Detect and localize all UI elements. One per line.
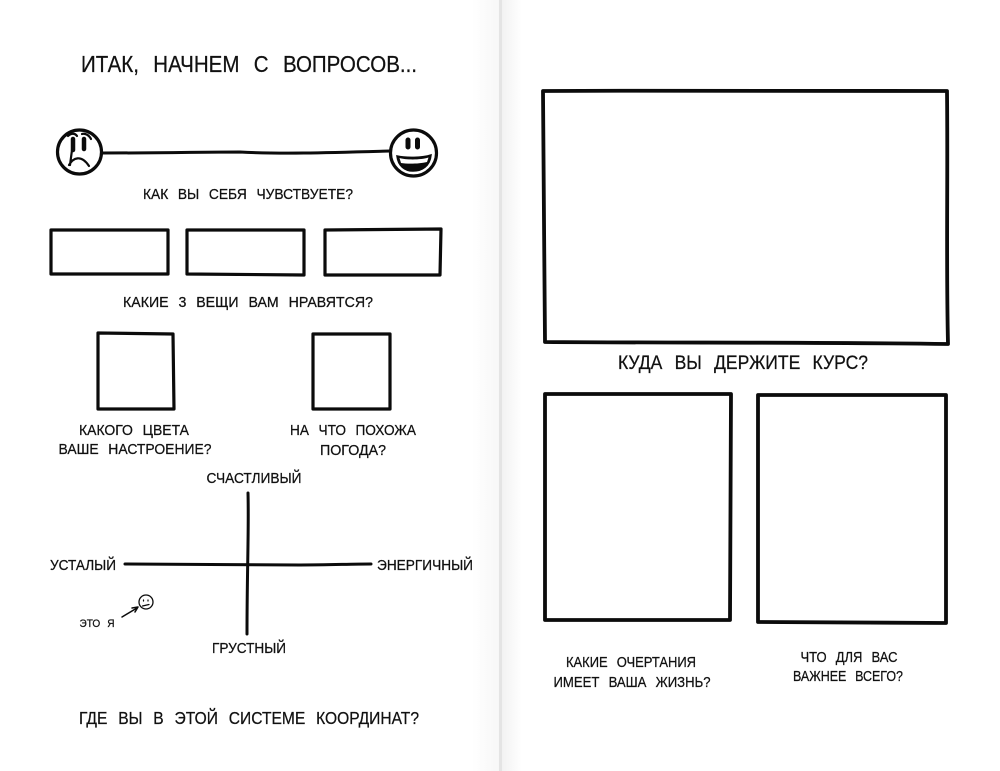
caption: mood colour: КАКОГО ЦВЕТА <box>79 423 189 439</box>
axis label: tired: УСТАЛЫЙ <box>50 556 116 574</box>
weather box <box>313 334 390 409</box>
caption: life shape: ИМЕЕТ ВАША ЖИЗНЬ? <box>554 675 710 691</box>
caption: course: КУДА ВЫ ДЕРЖИТЕ КУРС? <box>618 353 868 374</box>
caption: weather <box>290 423 416 459</box>
vertical axis <box>247 493 248 634</box>
axis label: sad: ГРУСТНЫЙ <box>212 639 286 657</box>
scale line <box>102 151 390 153</box>
this is me note <box>80 595 153 630</box>
caption: weather: НА ЧТО ПОХОЖА <box>290 423 416 439</box>
caption: what matters: ЧТО ДЛЯ ВАС <box>800 650 898 666</box>
arrow <box>122 607 138 617</box>
what matters box <box>758 395 946 623</box>
caption: life shape <box>554 655 710 691</box>
caption: life shape: КАКИЕ ОЧЕРТАНИЯ <box>566 655 696 671</box>
box 3 <box>325 229 441 275</box>
icon: small face <box>139 595 153 609</box>
icon: happy face <box>390 130 436 176</box>
icon: sad face <box>58 130 102 174</box>
large course box <box>543 91 948 344</box>
caption: mood colour: ВАШЕ НАСТРОЕНИЕ? <box>58 442 212 458</box>
book spine fold <box>472 0 522 771</box>
caption: mood colour <box>58 423 212 458</box>
mood scale <box>58 130 436 176</box>
life shape box <box>545 394 731 620</box>
title: ИТАК, НАЧНЕМ С ВОПРОСОВ... <box>81 51 417 77</box>
axis label: energetic: ЭНЕРГИЧНЫЙ <box>377 556 473 574</box>
caption: weather: ПОГОДА? <box>320 443 386 459</box>
box 2 <box>187 230 304 275</box>
caption: coordinates: ГДЕ ВЫ В ЭТОЙ СИСТЕМЕ КООРДИНАТ? <box>79 707 419 728</box>
caption: what matters: ВАЖНЕЕ ВСЕГО? <box>793 669 903 685</box>
caption: three things: КАКИЕ 3 ВЕЩИ ВАМ НРАВЯТСЯ? <box>123 295 373 311</box>
three boxes <box>51 229 441 275</box>
caption: how do you feel: КАК ВЫ СЕБЯ ЧУВСТВУЕТЕ? <box>143 187 353 203</box>
this is me note: ЭТО Я <box>80 618 115 630</box>
mood colour box <box>98 333 174 409</box>
axis label: happy: СЧАСТЛИВЫЙ <box>206 469 302 487</box>
horizontal axis <box>125 564 371 565</box>
coordinate system <box>50 469 473 657</box>
caption: what matters <box>793 650 903 685</box>
box 1 <box>51 230 168 274</box>
